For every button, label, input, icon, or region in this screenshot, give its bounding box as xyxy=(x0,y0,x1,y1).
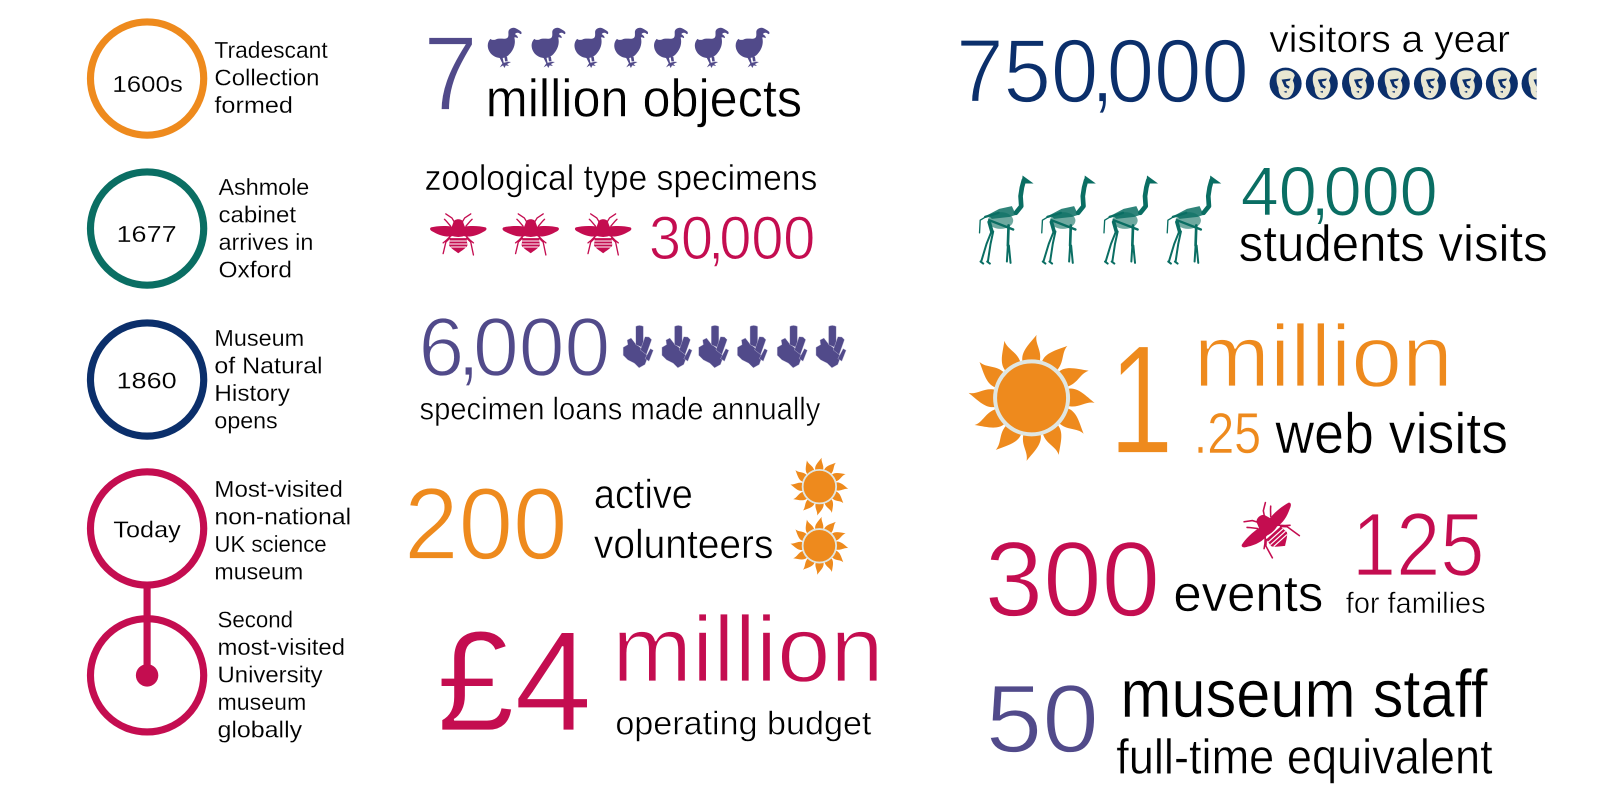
milestone: second most-visited: most-visited xyxy=(217,634,345,660)
milestone: 1677: cabinet xyxy=(218,201,297,227)
icon row: dodos xyxy=(488,28,769,68)
stat: zoological type specimens xyxy=(425,158,817,272)
milestone: 1677: Ashmole xyxy=(218,174,309,200)
milestone: 1600s: 1600s xyxy=(112,71,183,97)
milestone: second most-visited: Second xyxy=(217,606,293,632)
milestone: 1677 xyxy=(90,172,313,285)
milestone: today: museum xyxy=(214,558,303,584)
milestone: second most-visited xyxy=(90,584,345,743)
milestone: 1860 xyxy=(90,323,323,436)
milestone: today xyxy=(90,472,351,585)
icon row: giraffe skeletons xyxy=(980,175,1221,264)
icon row: portrait medallions xyxy=(1270,68,1554,100)
milestone: second most-visited: globally xyxy=(217,717,302,743)
milestone: 1860: 1860 xyxy=(116,368,177,394)
stat: zoological type specimens: zoological type specimens xyxy=(425,158,817,198)
timeline: museum history xyxy=(90,22,351,743)
milestone: 1860: Museum xyxy=(214,325,304,351)
icon row: bees xyxy=(430,214,631,255)
stat: 750,000 visitors: visitors a year xyxy=(1269,18,1510,60)
stat: 1.25 million web visits: million xyxy=(1194,308,1453,406)
stat: 1.25 million web visits xyxy=(969,308,1508,486)
stat: 50 museum staff xyxy=(986,657,1493,784)
stat: 40,000 students: students visits xyxy=(1239,215,1548,272)
milestone: 1600s xyxy=(90,22,328,135)
milestone: 1860: opens xyxy=(214,407,278,433)
icon: tilted bee xyxy=(1231,490,1311,569)
milestone: 1860: of Natural xyxy=(214,352,323,378)
stat: 1.25 million web visits: web visits xyxy=(1274,402,1508,466)
milestone: today: UK science xyxy=(214,531,327,557)
icon pair: small suns xyxy=(790,458,848,575)
stat: 4 million operating budget: million xyxy=(612,596,884,701)
stat: 4 million operating budget: £4 xyxy=(437,602,592,761)
stat: 300 events, 125 for families: events xyxy=(1173,565,1323,622)
icon: large sun xyxy=(969,335,1095,461)
stat: specimen loans xyxy=(418,299,846,426)
stat: 7 million objects: 7 xyxy=(424,15,478,133)
milestone: second most-visited: museum xyxy=(217,689,306,715)
milestone: today: Today xyxy=(113,517,181,543)
milestone: 1600s: formed xyxy=(214,92,293,118)
stat: 300 events, 125 for families: 300 xyxy=(985,519,1160,639)
milestone: 1677: 1677 xyxy=(116,221,177,247)
stat: 1.25 million web visits: 1 xyxy=(1109,313,1173,486)
stat: specimen loans: 6,000 xyxy=(418,299,610,393)
stat: 750,000 visitors: 750,000 xyxy=(956,22,1249,122)
milestone: today: Most-visited xyxy=(214,476,343,502)
stat: 7 million objects: million objects xyxy=(486,69,802,128)
stat: 4 million operating budget: operating budget xyxy=(615,706,872,743)
milestone: 1677: arrives in xyxy=(218,229,313,255)
stat: 1.25 million web visits: .25 xyxy=(1194,402,1261,466)
stat: 200 active volunteers: volunteers xyxy=(594,521,773,567)
stat: 40,000 students: 40,000 xyxy=(1241,152,1438,230)
stat: 300 events, 125 for families: for families xyxy=(1346,587,1486,620)
milestone: second most-visited: University xyxy=(217,661,323,687)
stat: zoological type specimens: 30,000 xyxy=(649,204,815,272)
stat: 40,000 students xyxy=(980,152,1548,272)
milestone: 1677: Oxford xyxy=(218,256,292,282)
stat: specimen loans: specimen loans made annually xyxy=(419,390,821,426)
stat: 200 active volunteers xyxy=(404,458,848,581)
milestone: 1600s: Collection xyxy=(214,65,319,91)
stat: 750,000 visitors xyxy=(961,24,1537,113)
stat: 200 active volunteers: active xyxy=(594,471,693,517)
icon row: crystals xyxy=(623,325,846,368)
stat: 50 museum staff: museum staff xyxy=(1120,657,1488,732)
stat: 300 events, 125 for families xyxy=(985,490,1486,639)
stat: 300 events, 125 for families: 125 xyxy=(1352,495,1485,595)
stat: 7 million objects xyxy=(424,15,802,133)
milestone: 1600s: Tradescant xyxy=(214,37,328,63)
stat: 50 museum staff: full-time equivalent xyxy=(1116,730,1493,784)
stat: 4 million operating budget xyxy=(437,596,884,761)
stat: 200 active volunteers: 200 xyxy=(404,467,567,581)
stat: 50 museum staff: 50 xyxy=(986,664,1099,773)
milestone: today: non-national xyxy=(214,503,351,529)
milestone: 1860: History xyxy=(214,380,290,406)
